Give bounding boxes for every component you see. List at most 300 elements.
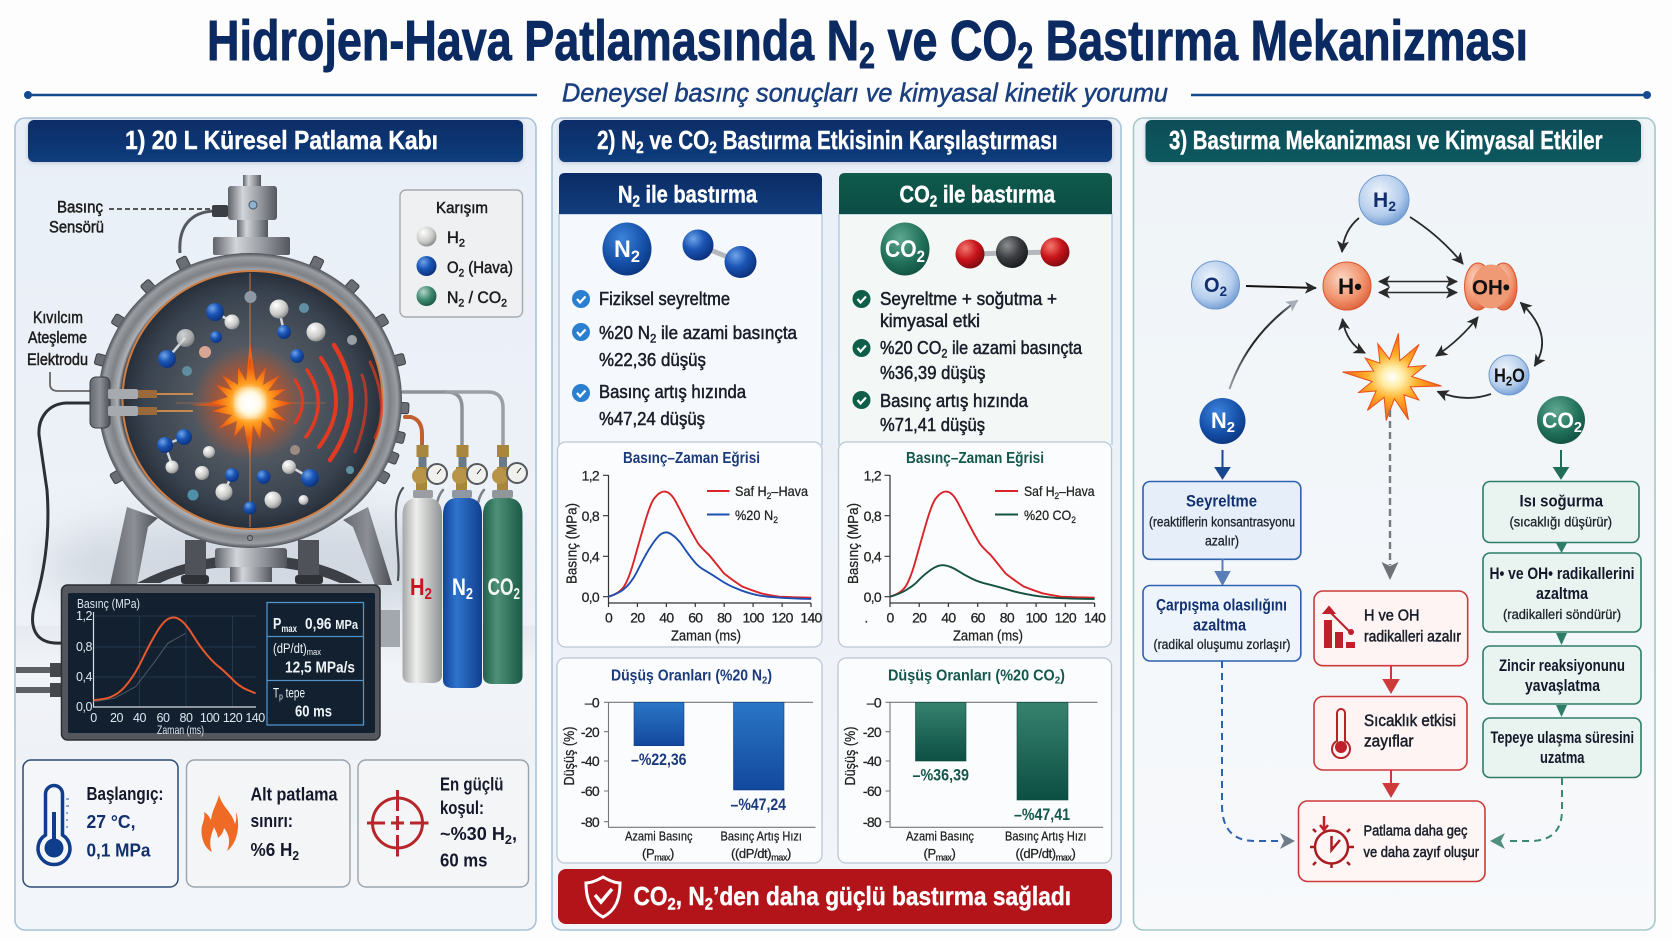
mixture legend: 2 xyxy=(459,238,465,250)
reaction arrows xyxy=(1230,217,1542,398)
conclusion banner: ’den daha güçlü bastırma sağladı xyxy=(713,881,1071,911)
box: dilution: (reaktiflerin konsantrasyonu xyxy=(1149,514,1295,530)
chart: pressure-time CO2: Saf H xyxy=(1024,483,1059,499)
chart: reduction CO2: ((dP/dt) xyxy=(1016,846,1056,861)
ignition electrode label: Elektrodu xyxy=(27,351,88,369)
node: N2 inhibitor: 2 xyxy=(1227,419,1235,436)
explosion flame xyxy=(190,342,308,461)
chart: pressure-time CO2: 0,4 xyxy=(864,548,882,564)
monitor readouts: max xyxy=(281,624,297,635)
box: radicals decrease: H ve OH xyxy=(1364,608,1420,624)
icon: CO2 badge: 2 xyxy=(917,247,925,266)
box: chain reaction xyxy=(1483,646,1641,704)
chart: reduction N2: 2 xyxy=(762,674,767,686)
conclusion banner: 2 xyxy=(668,894,676,914)
cylinder: N2: N xyxy=(452,574,469,601)
N2 column xyxy=(559,173,822,445)
title: Hidrojen-Hava Patlamasında N xyxy=(207,9,1034,73)
mixture legend: (Hava) xyxy=(464,259,513,277)
node: CO2 inhibitor xyxy=(1537,396,1585,444)
arrow: dilution to collision xyxy=(1216,559,1229,584)
box: dilution xyxy=(1143,482,1301,559)
chart: reduction CO2: ) xyxy=(952,846,956,861)
chart: pressure-time N2: %20 N xyxy=(735,507,777,523)
CO2 column heading xyxy=(839,173,1112,214)
arrow: temperature to outcome xyxy=(1384,770,1398,796)
chart: reduction N2: (P xyxy=(642,846,654,861)
list: N2 effects: %47,24 düşüş xyxy=(599,409,705,429)
ignition electrode label xyxy=(27,309,90,391)
flange bolts xyxy=(94,256,409,484)
regulators xyxy=(412,445,527,498)
molecules inside vessel xyxy=(157,291,357,514)
box: heat absorption xyxy=(1483,482,1639,542)
arrow: explosion to radicals xyxy=(1382,410,1398,580)
chart: reduction N2 xyxy=(557,658,822,863)
node: explosion xyxy=(1337,326,1448,428)
ignition electrodes xyxy=(90,377,193,428)
pressure sensor label xyxy=(49,198,213,236)
node: H2O xyxy=(1489,355,1529,395)
list: CO2 effects: %71,41 düşüş xyxy=(880,415,985,435)
chart: pressure-time N2: 1,2 xyxy=(582,468,600,484)
card: strongest condition: En güçlü xyxy=(440,774,504,794)
arrow: chain to peak time xyxy=(1556,705,1567,717)
card: lower explosion limit: Alt patlama xyxy=(250,784,338,804)
node: CO2 inhibitor: 2 xyxy=(1574,419,1582,436)
node: O2: O xyxy=(1204,274,1220,297)
node: OH radical xyxy=(1464,263,1517,310)
monitor readouts: tepe xyxy=(283,686,305,700)
chart: pressure-time CO2: 80 xyxy=(1000,610,1015,626)
monitor readouts: 60 ms xyxy=(295,704,332,720)
arrow: radicals to temperature xyxy=(1384,666,1398,692)
gas cylinders xyxy=(402,445,527,688)
conclusion banner: CO xyxy=(634,881,672,911)
monitor readouts: P xyxy=(273,616,284,633)
icon: thermometer xyxy=(38,786,70,865)
card: lower explosion limit: %6 H xyxy=(250,839,296,860)
chart: pressure-time CO2: –Hava xyxy=(1059,483,1095,499)
chart: pressure-time CO2: 0,8 xyxy=(864,508,882,524)
ignition electrode label: Kıvılcım xyxy=(33,309,83,327)
mixture legend: 2 xyxy=(501,298,507,310)
list: N2 effects: ile azami basınçta xyxy=(656,323,798,343)
arrow: collision to outcome xyxy=(1222,661,1295,849)
box: peak time: Tepeye ulaşma süresini xyxy=(1490,729,1634,747)
icon: delay timer xyxy=(1310,816,1354,868)
monitor readouts xyxy=(267,602,364,725)
bar: Pmax CO2 xyxy=(912,702,969,784)
bar: dP/dt N2: –%47,24 xyxy=(730,796,787,814)
list: N2 effects: 2 xyxy=(650,332,657,346)
box: outcome: Patlama daha geç xyxy=(1364,822,1468,840)
chart: reduction CO2: Düşüş Oranları (%20 CO xyxy=(888,668,1067,684)
box: chain reaction: Zincir reaksiyonunu xyxy=(1499,657,1625,675)
panel heading 2: 2 xyxy=(709,138,717,157)
subtitle xyxy=(24,78,1651,108)
monitor chart: Basınç (MPa) xyxy=(77,597,140,611)
node: H radical: H• xyxy=(1338,274,1362,299)
box: dilution: Seyreltme xyxy=(1186,492,1257,510)
panel: comparison xyxy=(552,118,1121,930)
box: heat absorption: Isı soğurma xyxy=(1520,492,1604,510)
icon: N2 molecule xyxy=(682,230,756,278)
box: radical reduction: azaltma xyxy=(1536,585,1589,603)
icon: CO2 badge xyxy=(880,222,930,276)
card: strongest condition: , xyxy=(512,823,517,844)
chart: pressure-time N2: 0,4 xyxy=(582,548,600,564)
node: O2: 2 xyxy=(1220,283,1227,299)
chart: reduction N2: Düşüş Oranları (%20 N xyxy=(611,668,778,684)
cable to flange xyxy=(33,403,90,643)
list: N2 effects xyxy=(572,289,798,429)
chart: pressure-time CO2: Basınç–Zaman Eğrisi xyxy=(906,450,1044,467)
monitor readouts: 0,96 MPa xyxy=(305,616,359,633)
mixture legend: H xyxy=(447,229,459,247)
chart: reduction N2: Düşüş (%) xyxy=(562,726,578,786)
node: O2 xyxy=(1192,261,1240,309)
cylinder: N2: 2 xyxy=(466,586,473,603)
card: lower explosion limit: 2 xyxy=(292,848,299,863)
monitor chart: 0,0 xyxy=(76,700,92,714)
chart: reduction CO2 xyxy=(838,658,1112,863)
chart: pressure-time N2: 0,0 xyxy=(582,589,600,605)
chart: reduction CO2: -40 xyxy=(863,753,882,769)
monitor readouts: max xyxy=(307,647,321,657)
arrow: CO2 down xyxy=(1554,450,1568,478)
chart: reduction N2: -60 xyxy=(581,783,600,799)
bar: dP/dt CO2: –%47,41 xyxy=(1014,806,1070,824)
chart: pressure-time CO2: %20 CO xyxy=(1024,507,1077,523)
chart: pressure-time N2: 80 xyxy=(717,610,732,626)
icon: target xyxy=(367,790,428,856)
chart: pressure-time N2: 0,8 xyxy=(582,508,600,524)
icon: N2 badge: N xyxy=(614,236,631,263)
chart: reduction CO2: 2 xyxy=(1055,674,1060,686)
chart: pressure-time N2: 100 xyxy=(742,610,765,626)
chart: reduction CO2: Basınç Artış Hızı xyxy=(1005,828,1086,844)
spherical vessel xyxy=(94,253,409,548)
mixture legend: 2 xyxy=(458,298,464,310)
title: ve CO xyxy=(875,9,1017,73)
conclusion banner: 2 xyxy=(705,894,713,914)
chart: pressure-time N2: 60 xyxy=(688,610,703,626)
card: strongest condition: 60 ms xyxy=(440,850,488,870)
pressure sensor label: Sensörü xyxy=(49,218,104,236)
node: N2 inhibitor: N xyxy=(1211,408,1227,433)
box: peak time xyxy=(1483,718,1641,778)
cylinder: CO2 xyxy=(483,498,522,684)
list: N2 effects: Basınç artış hızında xyxy=(599,382,747,402)
box: radical reduction xyxy=(1483,553,1641,632)
conclusion banner xyxy=(558,869,1112,924)
chart: pressure-time CO2 xyxy=(838,442,1112,647)
card: start conditions: 27 °C, xyxy=(86,811,136,832)
chart: pressure-time N2: 20 xyxy=(630,610,645,626)
card: strongest condition xyxy=(358,760,528,887)
ignition electrode label: Ateşleme xyxy=(28,329,87,347)
pressure sensor label: Basınç xyxy=(57,198,103,216)
box: radicals decrease xyxy=(1314,591,1468,666)
box: outcome: ve daha zayıf oluşur xyxy=(1364,844,1479,861)
list: N2 effects: Fiziksel seyreltme xyxy=(599,289,730,309)
list: CO2 effects: ile azami basınçta xyxy=(947,338,1083,358)
node: H radical xyxy=(1323,262,1371,310)
title: 2 xyxy=(1017,35,1033,76)
chart: pressure-time N2: 40 xyxy=(659,610,674,626)
chart: reduction N2: ) xyxy=(767,668,772,684)
panel heading 2: Bastırma Etkisinin Karşılaştırması xyxy=(717,125,1058,155)
cylinder: CO2: CO xyxy=(488,574,524,601)
monitor chart: 140 xyxy=(245,711,265,725)
box: collision xyxy=(1143,586,1301,661)
chart: pressure-time CO2: . xyxy=(864,610,868,626)
chart: reduction N2: max xyxy=(654,852,671,862)
monitor chart: 0 xyxy=(90,711,97,725)
chart: reduction CO2: -80 xyxy=(863,814,882,830)
chart: pressure-time N2: Basınç–Zaman Eğrisi xyxy=(623,450,760,467)
monitor chart: 60 xyxy=(157,711,170,725)
chart: reduction N2: –0 xyxy=(585,694,600,710)
node: H2O: 2 xyxy=(1506,374,1512,388)
chart: pressure-time N2: 2 xyxy=(767,491,771,502)
chart: pressure-time CO2: 0,0 xyxy=(864,589,882,605)
monitor chart: Zaman (ms) xyxy=(157,723,204,737)
node: H2 xyxy=(1359,175,1409,225)
card: strongest condition: ~%30 H xyxy=(440,823,506,844)
cylinder: H2: H xyxy=(410,574,427,601)
cylinder: N2 xyxy=(443,498,482,688)
monitor xyxy=(16,585,380,740)
arrow: radicals to chain xyxy=(1556,633,1567,645)
list: CO2 effects: Seyreltme + soğutma + xyxy=(880,289,1057,309)
chart: pressure-time CO2: Basınç (MPa) xyxy=(846,503,862,584)
chart: reduction CO2: -20 xyxy=(863,724,882,740)
bar: Pmax N2 xyxy=(631,702,686,769)
chart: reduction CO2: Düşüş (%) xyxy=(843,726,859,786)
panel heading 2: 2) N xyxy=(597,125,646,155)
chart: pressure-time CO2: Zaman (ms) xyxy=(953,628,1023,644)
arrow: N2 down xyxy=(1216,450,1229,478)
icon: flame xyxy=(201,795,238,852)
N2 column heading: N xyxy=(618,182,635,208)
box: outcome xyxy=(1298,801,1485,882)
arrow: peak time to outcome xyxy=(1490,778,1562,849)
arrow: heat to radicals xyxy=(1556,543,1567,553)
floor xyxy=(16,626,535,760)
chart: pressure-time N2: Basınç (MPa) xyxy=(564,503,580,584)
card: start conditions xyxy=(23,760,178,887)
chart: reduction N2: max xyxy=(771,852,788,862)
gas pipes xyxy=(396,392,503,580)
N2 column heading xyxy=(559,173,822,214)
CO2 column heading: ile bastırma xyxy=(937,182,1056,208)
chart: pressure-time CO2: 40 xyxy=(941,610,956,626)
mixture legend: O xyxy=(447,259,460,277)
chart: reduction N2: ) xyxy=(670,846,674,861)
mixture legend: N xyxy=(447,289,459,307)
chart: pressure-time CO2: 140 xyxy=(1084,610,1106,626)
icon: N2 badge xyxy=(602,222,652,276)
box: collision: (radikal oluşumu zorlaşır) xyxy=(1154,637,1290,652)
chart: pressure-time N2: 2 xyxy=(773,515,778,526)
bar: dP/dt CO2 xyxy=(1014,702,1070,824)
list: CO2 effects: 2 xyxy=(941,346,948,360)
monitor chart: 20 xyxy=(110,711,123,725)
monitor chart: 0,8 xyxy=(76,640,92,654)
vessel stand xyxy=(110,507,400,647)
chart: reduction N2: -20 xyxy=(581,724,600,740)
cylinder: H2 xyxy=(402,498,442,683)
cylinder: H2: 2 xyxy=(425,586,432,603)
panel heading 1: 1) 20 L Küresel Patlama Kabı xyxy=(125,125,438,155)
top pressure sensor xyxy=(180,175,290,255)
monitor chart: 0,4 xyxy=(76,670,92,684)
card: start conditions: 0,1 MPa xyxy=(86,840,151,860)
chart: pressure-time CO2: 20 xyxy=(912,610,927,626)
chart: pressure-time N2: Saf H xyxy=(735,483,770,499)
N2 column heading: 2 xyxy=(632,194,640,210)
CO2 column heading: 2 xyxy=(930,194,937,210)
chart: pressure-time CO2: 2 xyxy=(1055,491,1059,502)
panel: mechanism xyxy=(1134,118,1655,930)
list: CO2 effects: %20 CO xyxy=(880,338,948,358)
chart: reduction CO2: Azami Basınç xyxy=(906,828,974,844)
chart: pressure-time N2: 140 xyxy=(800,610,823,626)
icon: N2 badge: 2 xyxy=(631,247,640,266)
box: heat absorption: (sıcaklığı düşürür) xyxy=(1510,514,1612,530)
list: CO2 effects: %36,39 düşüş xyxy=(880,363,986,383)
panel heading 2 xyxy=(559,120,1112,162)
box: temperature effect xyxy=(1314,696,1467,770)
icon: shield xyxy=(586,877,620,917)
box: collision: azaltma xyxy=(1193,616,1247,634)
chart: pressure-time CO2: 120 xyxy=(1055,610,1077,626)
monitor chart: 120 xyxy=(223,711,243,725)
chart: reduction N2: Basınç Artış Hızı xyxy=(720,828,802,844)
chart: reduction CO2: (P xyxy=(924,846,936,861)
list: CO2 effects: kimyasal etki xyxy=(880,311,980,331)
monitor readouts: p xyxy=(279,692,283,702)
bar: Pmax CO2: –%36,39 xyxy=(912,766,969,784)
node: CO2 inhibitor: CO xyxy=(1542,408,1575,433)
icon: CO2 molecule xyxy=(956,236,1070,268)
list: N2 effects: %22,36 düşüş xyxy=(599,350,706,370)
cylinder: CO2: 2 xyxy=(514,586,520,603)
chart: reduction CO2: –0 xyxy=(867,694,882,710)
box: dilution: azalır) xyxy=(1205,534,1239,548)
node: H2: H xyxy=(1373,189,1388,212)
box: radical reduction: H• ve OH• radikallerini xyxy=(1490,565,1634,583)
node: OH radical: OH• xyxy=(1472,276,1510,300)
chart: reduction CO2: max xyxy=(1056,852,1072,862)
icon: falling bars xyxy=(1324,607,1355,648)
box: collision: Çarpışma olasılığını xyxy=(1156,596,1287,614)
monitor chart: 1,2 xyxy=(76,609,92,623)
icon: small thermometer xyxy=(1332,709,1350,758)
panel heading 1 xyxy=(28,120,523,162)
monitor chart: 100 xyxy=(200,711,220,725)
node: H2O: O xyxy=(1512,366,1525,387)
N2 column heading: ile bastırma xyxy=(640,182,758,208)
box: chain reaction: yavaşlatma xyxy=(1525,677,1601,695)
chart: reduction CO2: ) xyxy=(1072,846,1076,861)
chart: reduction N2: ) xyxy=(787,846,791,861)
card: lower explosion limit xyxy=(186,760,350,887)
mixture legend xyxy=(400,190,522,317)
node: H2O: H xyxy=(1494,366,1508,387)
panel heading 3 xyxy=(1146,120,1641,162)
title: Bastırma Mekanizması xyxy=(1033,9,1528,73)
card: strongest condition: koşul: xyxy=(440,797,484,818)
card: lower explosion limit: sınırı: xyxy=(250,810,293,831)
box: radical reduction: (radikalleri söndürür) xyxy=(1503,607,1621,622)
node: H2: 2 xyxy=(1388,198,1396,214)
monitor chart: 40 xyxy=(133,711,146,725)
chart: pressure-time CO2: 100 xyxy=(1025,610,1048,626)
list: CO2 effects: Basınç artış hızında xyxy=(880,391,1029,411)
monitor chart xyxy=(76,597,265,737)
monitor chart: 80 xyxy=(180,711,193,725)
chart: pressure-time CO2: 1,2 xyxy=(864,468,882,484)
CO2 column heading: CO xyxy=(900,182,936,208)
chart: reduction N2: -40 xyxy=(581,753,600,769)
icon: CO2 badge: CO xyxy=(885,236,921,263)
chart: pressure-time N2: –Hava xyxy=(771,483,808,499)
chart: reduction N2: ((dP/dt) xyxy=(731,846,771,861)
mixture legend: 2 xyxy=(459,268,464,280)
panel heading 2: 2 xyxy=(636,138,644,157)
backdrop shade xyxy=(40,515,500,615)
box: radicals decrease: radikalleri azalır xyxy=(1364,628,1462,646)
card: strongest condition: 2 xyxy=(505,832,512,847)
card: start conditions: Başlangıç: xyxy=(86,783,164,804)
box: peak time: uzatma xyxy=(1540,749,1585,767)
chart: pressure-time N2: 0 xyxy=(605,610,613,626)
chart: pressure-time N2 xyxy=(558,442,823,647)
mixture legend: / CO xyxy=(464,289,501,307)
monitor readouts: (dP/dt) xyxy=(273,641,314,656)
conclusion banner: , N xyxy=(676,881,705,911)
panel: 20 L vessel xyxy=(15,118,536,930)
mixture legend: Karışım xyxy=(436,200,488,217)
node: N2 inhibitor xyxy=(1200,398,1246,444)
chart: reduction CO2: ) xyxy=(1060,668,1065,684)
list: N2 effects: %20 N xyxy=(599,323,653,343)
chart: pressure-time N2: 120 xyxy=(771,610,794,626)
chart: reduction N2: -80 xyxy=(581,814,600,830)
box: temperature effect: Sıcaklık etkisi xyxy=(1364,712,1456,730)
chart: pressure-time CO2: 0 xyxy=(886,610,894,626)
chart: pressure-time N2: Zaman (ms) xyxy=(671,628,741,644)
chart: reduction CO2: max xyxy=(936,852,952,862)
panel heading 2: ve CO xyxy=(644,125,709,155)
box: temperature effect: zayıflar xyxy=(1364,732,1414,750)
subtitle: Deneysel basınç sonuçları ve kimyasal kinetik yorumu xyxy=(562,78,1168,108)
title: 2 xyxy=(859,35,875,76)
monitor readouts: T xyxy=(273,686,281,700)
bar: dP/dt N2 xyxy=(730,702,787,814)
chart: pressure-time CO2: 2 xyxy=(1071,515,1076,526)
chart: reduction CO2: -60 xyxy=(863,783,882,799)
chart: pressure-time CO2: 60 xyxy=(971,610,986,626)
CO2 column xyxy=(839,173,1112,445)
list: CO2 effects xyxy=(852,289,1083,435)
pressure waves xyxy=(295,345,381,460)
monitor readouts: 12,5 MPa/s xyxy=(285,660,355,676)
bar: Pmax N2: –%22,36 xyxy=(631,751,686,769)
